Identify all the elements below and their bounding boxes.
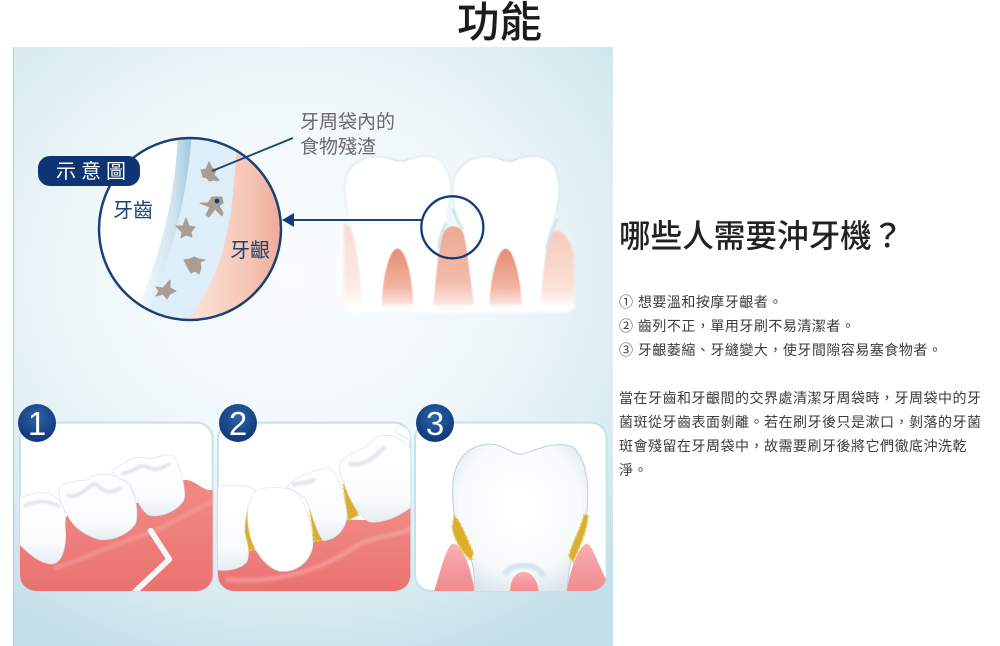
callout: food debris: 食物殘渣 (300, 136, 376, 158)
explanation paragraph (619, 390, 982, 478)
who-needs list (619, 294, 942, 358)
step 2 panel (217, 423, 412, 592)
explanation paragraph: 當在牙齒和牙齦間的交界處清潔牙周袋時，牙周袋中的牙 (619, 390, 982, 406)
interdental gum (433, 226, 475, 310)
occlusal shading (23, 463, 170, 507)
teeth shadows (345, 156, 559, 227)
right heading: 哪些人需要沖牙機？ (619, 218, 903, 254)
crown outlines (392, 159, 517, 161)
tooth roots pulp (382, 249, 413, 308)
root shadow (505, 565, 543, 577)
callout: food debris: 牙周袋內的 (300, 111, 395, 133)
badge 2 (219, 404, 257, 442)
magnified circle (98, 136, 294, 322)
badge 2: 2 (229, 405, 247, 442)
badge 3: 3 (426, 405, 444, 442)
plaque (452, 516, 473, 561)
explanation paragraph: 斑會殘留在牙周袋中，故需要刷牙後將它們徹底沖洗乾 (619, 438, 967, 454)
big teeth illustration (344, 156, 575, 312)
magnifier circle (421, 196, 483, 258)
gums behind teeth (344, 223, 575, 308)
badge: diagram label (38, 156, 140, 186)
teeth (217, 425, 412, 570)
who-needs list: ① 想要溫和按摩牙齦者。 (619, 294, 783, 310)
tooth (453, 444, 588, 592)
gums (434, 544, 475, 592)
badge 1: 1 (28, 405, 46, 442)
root gum (510, 572, 539, 592)
base fade (345, 305, 572, 312)
label: tooth: 牙齒 (113, 199, 153, 222)
gum area (188, 152, 280, 319)
who-needs list: ② 齒列不正，單用牙刷不易清潔者。 (619, 318, 855, 334)
arrow: teeth to magnified view (282, 213, 422, 227)
explanation paragraph: 淨。 (619, 462, 648, 478)
debris (156, 162, 223, 299)
teeth (346, 157, 558, 310)
plaque (244, 484, 359, 550)
teeth (18, 455, 185, 564)
gum-line deposits (439, 208, 557, 250)
badge: diagram label: 示意圖 (56, 160, 131, 183)
leader line (212, 138, 293, 171)
explanation paragraph: 菌斑從牙齒表面剝離。若在刷牙後只是漱口，剝落的牙菌 (619, 414, 982, 430)
who-needs list: ③ 牙齦萎縮、牙縫變大，使牙間隙容易塞食物者。 (619, 342, 942, 358)
toothpick (135, 531, 169, 592)
occlusal shading (292, 447, 385, 485)
step 3 panel (415, 423, 608, 592)
badge 1 (18, 404, 56, 442)
label: gum: 牙齦 (230, 239, 270, 262)
front tooth (248, 487, 313, 571)
illustration panel (13, 47, 613, 646)
title: 功能 (457, 0, 542, 47)
badge 3 (416, 404, 454, 442)
step 1 panel (18, 423, 213, 592)
teeth glow (347, 233, 570, 312)
